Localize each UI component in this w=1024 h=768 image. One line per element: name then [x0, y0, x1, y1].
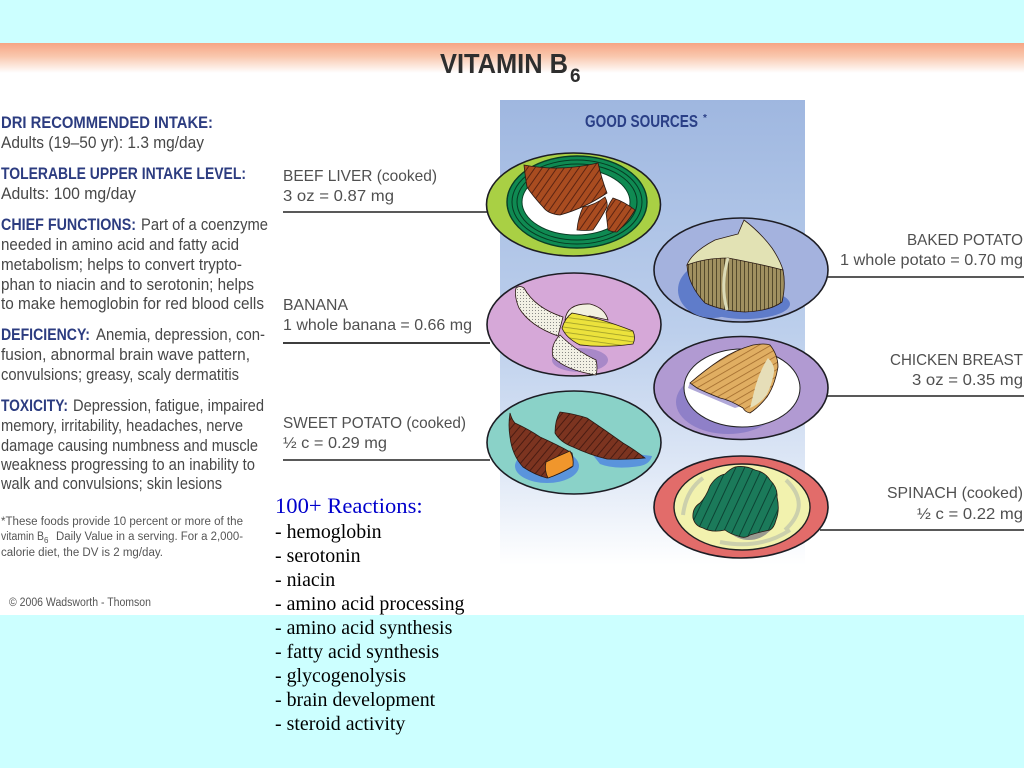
toxicity: weakness progressing to an inability to [0, 456, 255, 474]
copyright: © 2006 Wadsworth - Thomson [9, 597, 151, 609]
chart background sheet [0, 43, 1024, 615]
sweet potato label [283, 415, 490, 460]
chief functions: phan to niacin and to serotonin; helps [1, 276, 254, 294]
DRI recommended intake: DRI RECOMMENDED INTAKE: [1, 114, 213, 132]
beef liver label [283, 168, 490, 212]
icon: spinach plate [654, 456, 828, 558]
callout: 100+ reactions list: - niacin [275, 569, 335, 591]
DRI recommended intake: Adults (19–50 yr): 1.3 mg/day [1, 134, 205, 152]
icon: baked potato plate [654, 218, 828, 322]
deficiency: convulsions; greasy, scaly dermatitis [1, 366, 239, 384]
callout: 100+ reactions list: 100+ Reactions: [275, 493, 423, 518]
beef liver label: BEEF LIVER (cooked) [283, 168, 437, 185]
icon: sweet potato plate [487, 391, 661, 494]
chief functions: needed in amino acid and fatty acid [1, 236, 239, 254]
DRI recommended intake [1, 114, 213, 152]
good sources heading: GOOD SOURCES [585, 111, 698, 131]
callout: 100+ reactions list: - hemoglobin [275, 521, 382, 543]
toxicity: TOXICITY: [1, 397, 68, 415]
callout: 100+ reactions list: - amino acid processing [275, 593, 465, 615]
panel: good sources [500, 100, 805, 565]
baked potato label [825, 232, 1024, 277]
tolerable upper intake level: TOLERABLE UPPER INTAKE LEVEL: [1, 165, 246, 183]
footnote: vitamin B [1, 531, 44, 543]
title: VITAMIN B [440, 48, 568, 79]
callout: 100+ reactions list: - glycogenolysis [275, 665, 406, 687]
deficiency: Anemia, depression, con- [96, 326, 265, 344]
callout: 100+ reactions list: - amino acid synthesis [275, 617, 453, 639]
callout: 100+ reactions list: - serotonin [275, 545, 361, 567]
chief functions [1, 216, 268, 313]
toxicity [0, 397, 264, 493]
banana label: BANANA [283, 297, 348, 314]
chicken breast label: 3 oz = 0.35 mg [912, 372, 1023, 389]
footnote: Daily Value in a serving. For a 2,000- [56, 531, 243, 543]
callout: 100+ reactions list: - steroid activity [275, 713, 405, 735]
icon: chicken breast plate [654, 336, 828, 440]
panel: nutrition facts [0, 114, 268, 609]
chicken breast label [825, 352, 1024, 396]
spinach label: SPINACH (cooked) [887, 485, 1023, 502]
footnote: 6 [44, 536, 49, 545]
chief functions: Part of a coenzyme [141, 216, 268, 234]
beef liver label: 3 oz = 0.87 mg [283, 188, 394, 205]
toxicity: memory, irritability, headaches, nerve [1, 417, 243, 435]
banana label [283, 297, 490, 343]
chief functions: metabolism; helps to convert trypto- [1, 256, 242, 274]
spinach label: ½ c = 0.22 mg [917, 506, 1023, 523]
deficiency [1, 326, 265, 384]
icon: banana plate [487, 273, 661, 376]
chief functions: CHIEF FUNCTIONS: [1, 216, 136, 234]
callout: 100+ reactions list [275, 493, 465, 735]
footnote: calorie diet, the DV is 2 mg/day. [1, 547, 163, 559]
banana label: 1 whole banana = 0.66 mg [283, 317, 472, 334]
icon: beef liver plate [486, 153, 660, 256]
toxicity: damage causing numbness and muscle [1, 437, 258, 455]
sweet potato label: SWEET POTATO (cooked) [283, 415, 466, 432]
baked potato label: 1 whole potato = 0.70 mg [840, 252, 1023, 269]
toxicity: Depression, fatigue, impaired [73, 397, 264, 415]
header gradient band [0, 43, 1024, 73]
toxicity: walk and convulsions; skin lesions [0, 475, 222, 493]
spinach label [820, 485, 1024, 530]
chief functions: to make hemoglobin for red blood cells [1, 295, 264, 313]
deficiency: fusion, abnormal brain wave pattern, [1, 346, 250, 364]
good sources heading: * [703, 113, 707, 124]
tolerable upper intake level: Adults: 100 mg/day [1, 185, 137, 203]
deficiency: DEFICIENCY: [1, 326, 90, 344]
footnote: *These foods provide 10 percent or more of the [1, 516, 243, 528]
callout: 100+ reactions list: - brain development [275, 689, 436, 711]
callout: 100+ reactions list: - fatty acid synthesis [275, 641, 439, 663]
title: 6 [570, 66, 581, 87]
sweet potato label: ½ c = 0.29 mg [283, 435, 387, 452]
tolerable upper intake level [1, 165, 246, 203]
footnote [1, 516, 243, 559]
